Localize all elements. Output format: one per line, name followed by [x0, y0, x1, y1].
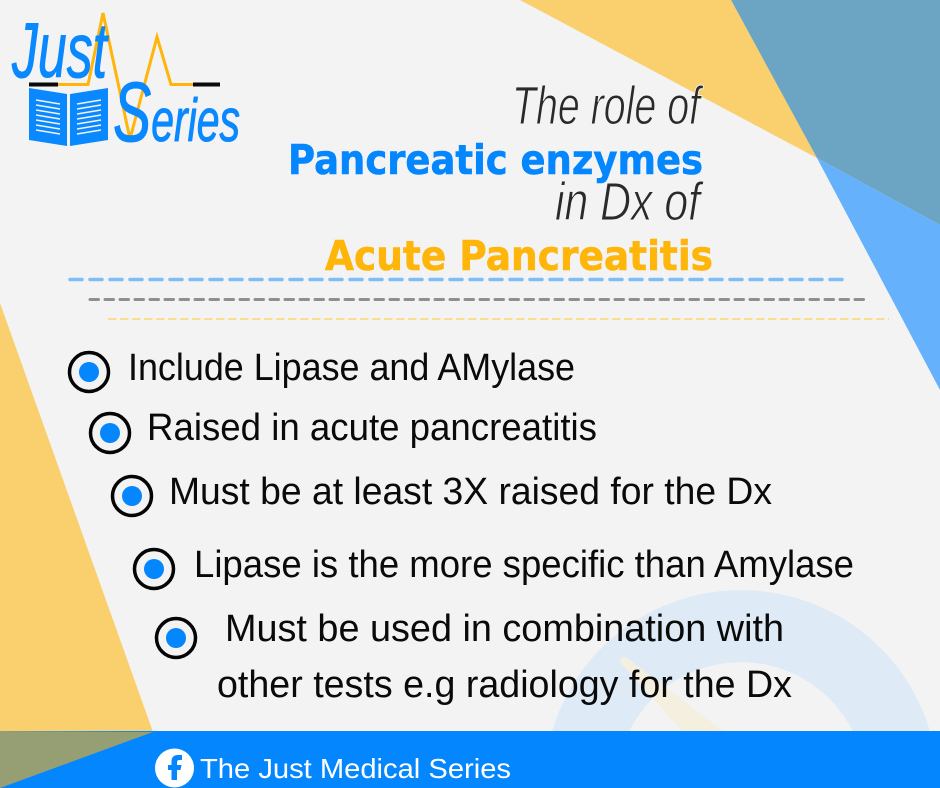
bullet 2: Raised in acute pancreatitis [147, 407, 597, 449]
title line: The role of: The role of [512, 76, 704, 136]
icon: facebook [155, 748, 194, 788]
bullet list [70, 347, 854, 706]
shape: pale gauge arc [582, 626, 900, 760]
footer facebook link [155, 748, 511, 788]
logo word Just: Just [11, 6, 109, 94]
bullet 5: Must be used in combination with [225, 608, 784, 650]
logo [11, 6, 240, 159]
bullet 5 [156, 608, 792, 706]
footer bar [0, 731, 940, 788]
footer text: The Just Medical Series [200, 753, 511, 784]
bullet 3: Must be at least 3X raised for the Dx [169, 471, 772, 513]
bullet 5: other tests e.g radiology for the Dx [217, 664, 792, 706]
shape: right light blue triangle [817, 158, 940, 390]
title line: in Dx of: in Dx of [555, 172, 704, 232]
title line: Acute Pancreatitis: Acute Pancreatitis [325, 232, 713, 280]
shape: top teal panel [731, 0, 940, 225]
title line: Pancreatic enzymes: Pancreatic enzymes [288, 136, 703, 184]
bullet 1: Include Lipase and AMylase [128, 347, 575, 389]
logo word Series: Series [113, 65, 240, 159]
bullet 4: Lipase is the more specific than Amylase [194, 544, 854, 586]
logo black dashes [29, 82, 220, 86]
shape: olive corner [0, 731, 153, 788]
logo heartbeat line [58, 13, 193, 139]
shape: left yellow triangle [0, 303, 153, 788]
icon: open book [29, 88, 108, 146]
title [288, 76, 713, 280]
shape: top yellow triangle [520, 0, 817, 158]
shape: pale gauge needle [620, 657, 726, 733]
